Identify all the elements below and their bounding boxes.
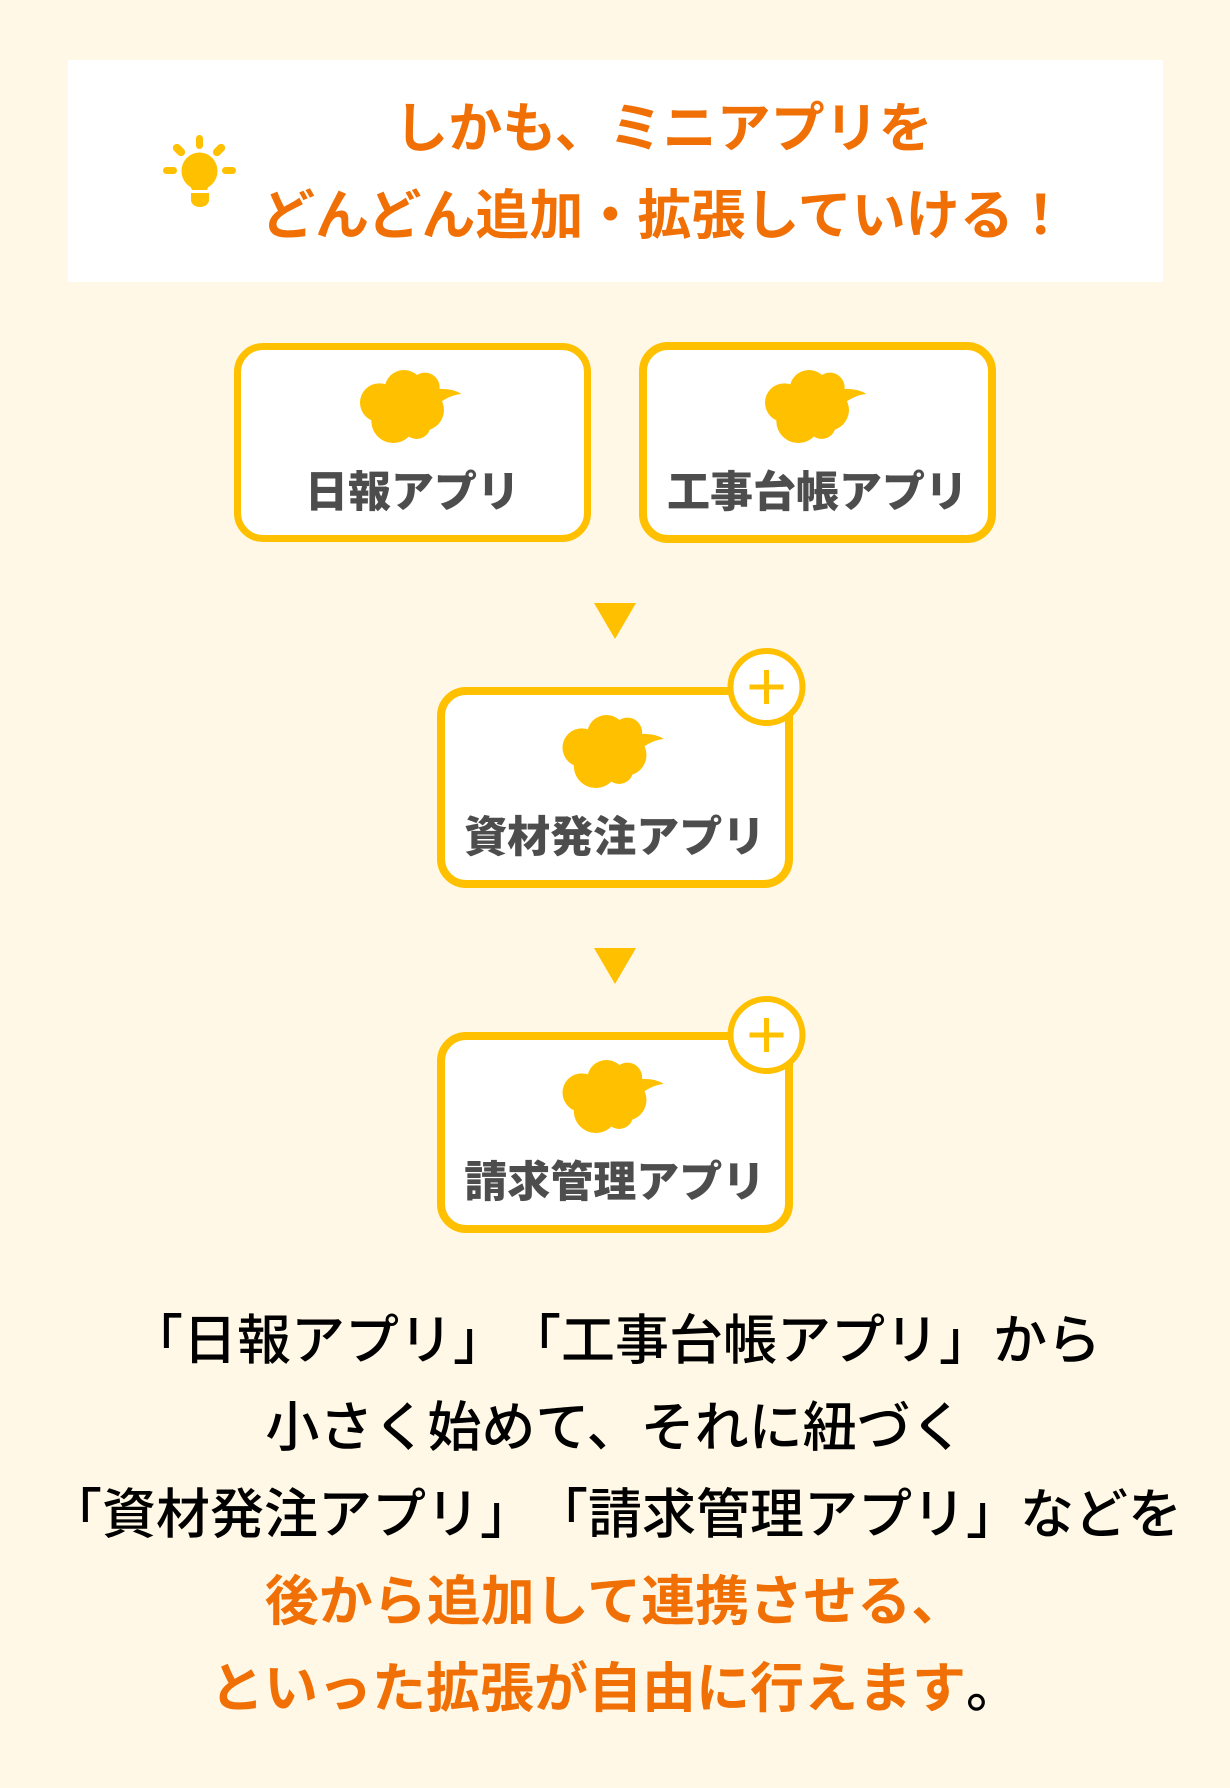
card: 請求管理アプリ (436, 1032, 793, 1233)
heading line 1: しかも、ミニアプリを (394, 99, 933, 159)
body line 3: 「資材発注アプリ」「請求管理アプリ」などを (48, 1485, 1182, 1545)
card: 日報アプリ (234, 343, 591, 542)
label: 工事台帳アプリ (667, 469, 968, 517)
card: 工事台帳アプリ (639, 342, 996, 543)
heading line 2: どんどん追加・拡張していける！ (261, 186, 1068, 246)
text block: explanation (48, 1311, 1182, 1719)
body line 5: といった拡張が自由に行えます。 (210, 1659, 1020, 1719)
label: 資材発注アプリ (464, 814, 765, 862)
panel: headline banner (68, 60, 1163, 282)
icon: light bulb (163, 135, 236, 207)
label: 日報アプリ (305, 469, 520, 517)
body line 2: 小さく始めて、それに紐づく (265, 1398, 965, 1458)
body line 4: 後から追加して連携させる、 (265, 1572, 965, 1632)
body line 1: 「日報アプリ」「工事台帳アプリ」から (129, 1311, 1101, 1371)
label: 請求管理アプリ (464, 1159, 765, 1207)
card: 資材発注アプリ (436, 687, 793, 888)
